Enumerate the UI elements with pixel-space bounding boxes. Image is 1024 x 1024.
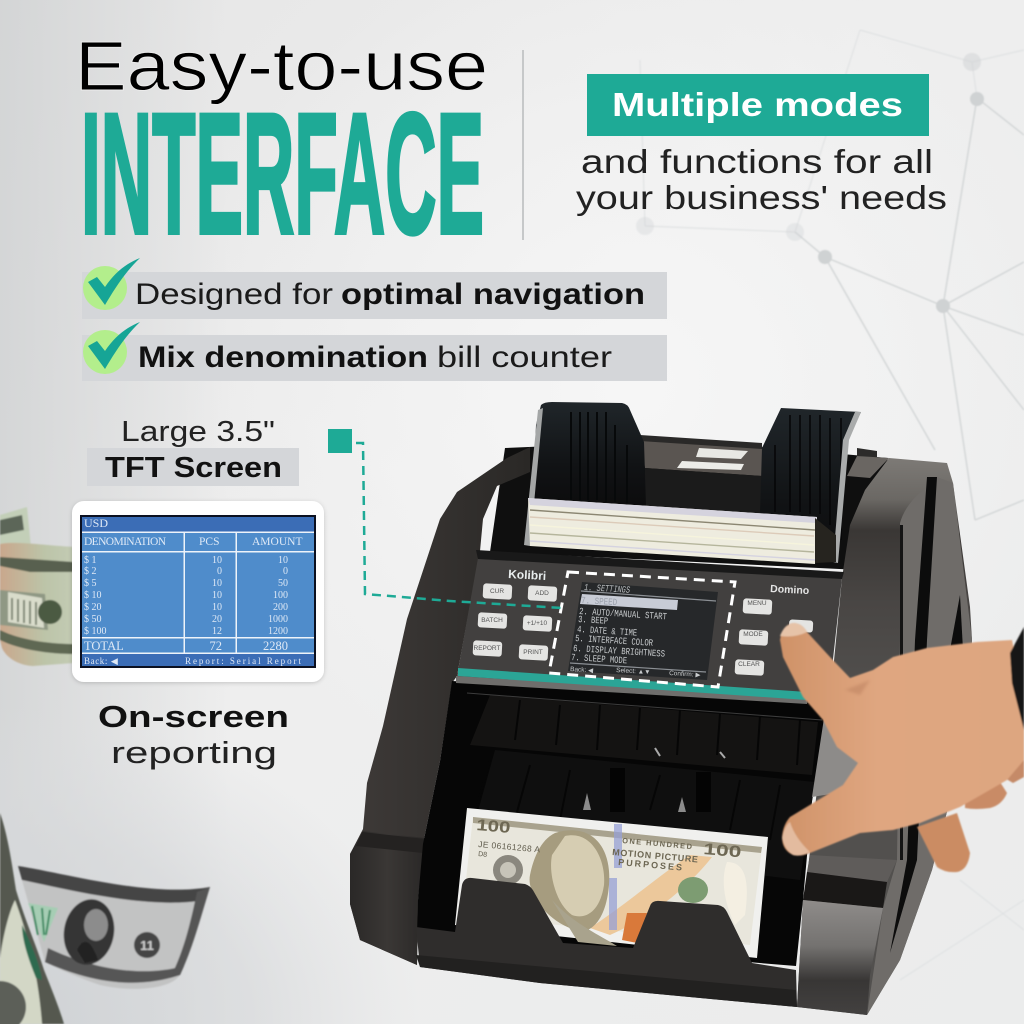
label: TFT Screen xyxy=(87,448,299,486)
bill: bottom-left foreground curl xyxy=(0,813,64,1024)
device screen: 7. SLEEP MODE xyxy=(571,652,628,666)
panel buttons xyxy=(473,583,813,676)
panel buttons: MENU xyxy=(747,600,767,607)
palm and index finger xyxy=(780,623,1024,856)
brand: Kolibri xyxy=(508,567,547,583)
device screen xyxy=(568,582,718,680)
left band xyxy=(356,832,425,853)
outer slot xyxy=(950,595,963,650)
screen card: report table: PCS xyxy=(199,536,219,548)
front banknote: MOTION PICTURE xyxy=(612,847,698,864)
subheading: and functions for all xyxy=(581,143,933,180)
machine: bill counter xyxy=(350,402,972,1015)
thumbnail xyxy=(782,822,810,856)
screen card: report table: 10 xyxy=(212,555,222,566)
right shoulder and side xyxy=(797,458,972,1015)
deck labels xyxy=(640,435,889,515)
screen card: report table: TOTAL xyxy=(84,639,124,653)
label: On-screen reporting: On-screen xyxy=(98,699,289,734)
screen card: report table: 12 xyxy=(212,626,222,637)
teal strip xyxy=(458,668,807,700)
screen card: report table: DENOMINATION xyxy=(84,536,167,548)
left block xyxy=(350,831,425,965)
control panel xyxy=(456,558,842,704)
left hopper xyxy=(524,402,646,546)
feature row: optimal navigation: optimal navigation xyxy=(341,278,645,311)
feature row: optimal navigation: Designed for xyxy=(135,278,333,311)
panel buttons: ADD xyxy=(535,590,549,597)
screen card: report table: 0 xyxy=(217,566,222,577)
lower right block xyxy=(797,900,883,1015)
badge: Multiple modes xyxy=(587,74,929,136)
device screen: Back: ◀ xyxy=(570,666,594,674)
black slit xyxy=(890,477,937,953)
screen card: report table: 10 xyxy=(212,578,222,589)
panel buttons: +1/+10 xyxy=(527,620,548,627)
front banknote: 100 xyxy=(476,817,511,837)
device screen: 7. SPEED xyxy=(581,595,618,608)
subheading xyxy=(576,143,947,216)
screen card: report table: 1000 xyxy=(268,614,288,625)
screen card: report table: Report: Serial Report xyxy=(185,656,301,666)
middle finger xyxy=(965,782,1007,809)
subheading: your business' needs xyxy=(576,179,947,216)
tray lip xyxy=(416,955,797,1007)
grey plate by hand xyxy=(812,705,862,797)
left column xyxy=(350,447,530,965)
label: TFT Screen: TFT Screen xyxy=(105,452,282,484)
panel buttons: BATCH xyxy=(481,617,503,624)
screen card: report table: $ 2 xyxy=(84,566,96,577)
screen card: report table: Back: ◀ xyxy=(84,656,118,666)
device screen: 5. INTERFACE COLOR xyxy=(575,633,654,649)
label: On-screen reporting: reporting xyxy=(111,735,277,770)
panel buttons: REPORT xyxy=(474,645,501,652)
screen card: report table: 50 xyxy=(278,578,288,589)
screen card: report table: 2280 xyxy=(263,639,288,653)
panel top edge xyxy=(476,550,844,579)
screen card: report table: $ 50 xyxy=(84,614,102,625)
little finger xyxy=(1003,760,1024,783)
feature row: mix denomination xyxy=(82,322,667,381)
screen card: report table: 10 xyxy=(278,555,288,566)
screen card: report table: 72 xyxy=(210,639,222,653)
front tray xyxy=(416,878,797,1007)
upper lower-right block xyxy=(807,855,897,882)
screen card: report table: $ 5 xyxy=(84,578,96,589)
device screen: Confirm: ▶ xyxy=(669,670,702,679)
device screen: 1. SETTINGS xyxy=(584,582,631,596)
feed ribs xyxy=(467,693,822,880)
front banknote: JE 06161268 A xyxy=(478,839,541,854)
device screen: 2. AUTO/MANUAL START xyxy=(579,606,668,622)
screen card: report table: 10 xyxy=(212,602,222,613)
feature row: optimal navigation xyxy=(82,258,667,319)
front banknote: D8 xyxy=(478,851,487,859)
dashed highlight xyxy=(549,572,735,687)
panel buttons: PRINT xyxy=(523,649,543,656)
connector xyxy=(328,429,562,608)
feature row: mix denomination: Mix denomination xyxy=(138,341,428,374)
label: On-screen reporting xyxy=(98,699,289,770)
device screen: 4. DATE & TIME xyxy=(577,624,638,639)
network pattern xyxy=(636,30,1024,980)
screen card: report table: $ 20 xyxy=(84,602,102,613)
screen card: report table: USD xyxy=(84,516,108,530)
fingernail xyxy=(780,623,807,636)
front banknote: PURPOSES xyxy=(618,857,682,873)
rear deck xyxy=(490,442,888,570)
screen card: report table: 1200 xyxy=(268,626,288,637)
sleeve xyxy=(1010,627,1024,730)
device screen: Select: ▲▼ xyxy=(616,667,651,676)
bill: bottom-left grayscale: 11 xyxy=(140,938,154,953)
feature row: mix denomination: bill counter xyxy=(437,341,612,374)
panel buttons: CLEAR xyxy=(738,661,760,668)
screen card: report table: 200 xyxy=(273,602,288,613)
screen card: report table: 10 xyxy=(212,590,222,601)
curled finger xyxy=(917,813,970,872)
badge: Multiple modes: Multiple modes xyxy=(612,86,903,123)
bill: left curled xyxy=(0,507,74,666)
screen card: report table: 20 xyxy=(212,614,222,625)
divider xyxy=(522,50,524,240)
screen card: report table: 0 xyxy=(283,566,288,577)
title: Easy-to-use: Easy-to-use xyxy=(75,27,488,105)
screen card: report table xyxy=(72,501,324,682)
screen card: report table: $ 100 xyxy=(84,626,106,637)
right hopper xyxy=(760,408,861,563)
panel seam xyxy=(900,525,903,860)
device screen: 6. DISPLAY BRIGHTNESS xyxy=(573,643,666,660)
knuckle shadow xyxy=(845,680,870,695)
hand xyxy=(780,623,1024,872)
panel buttons: CUR xyxy=(490,588,504,595)
label: Large 3.5 inch: Large 3.5" xyxy=(121,416,275,448)
model name: Domino xyxy=(770,583,809,597)
panel bottom edge xyxy=(456,676,807,704)
screen card: report table: $ 10 xyxy=(84,590,102,601)
inner cavity xyxy=(417,681,832,966)
screen card: report table: 100 xyxy=(273,590,288,601)
banknote stack xyxy=(528,498,836,564)
right strip xyxy=(867,477,972,1015)
screen card: report table: $ 1 xyxy=(84,555,96,566)
screen card: report table: AMOUNT xyxy=(252,536,302,548)
front banknote: ONE HUNDRED xyxy=(622,836,693,851)
device screen: 3. BEEP xyxy=(578,614,609,627)
bill: bottom-left grayscale xyxy=(18,866,210,989)
front banknote xyxy=(455,808,768,958)
panel buttons: MODE xyxy=(743,631,763,638)
front banknote: 100 xyxy=(703,841,742,861)
black band xyxy=(803,872,887,908)
